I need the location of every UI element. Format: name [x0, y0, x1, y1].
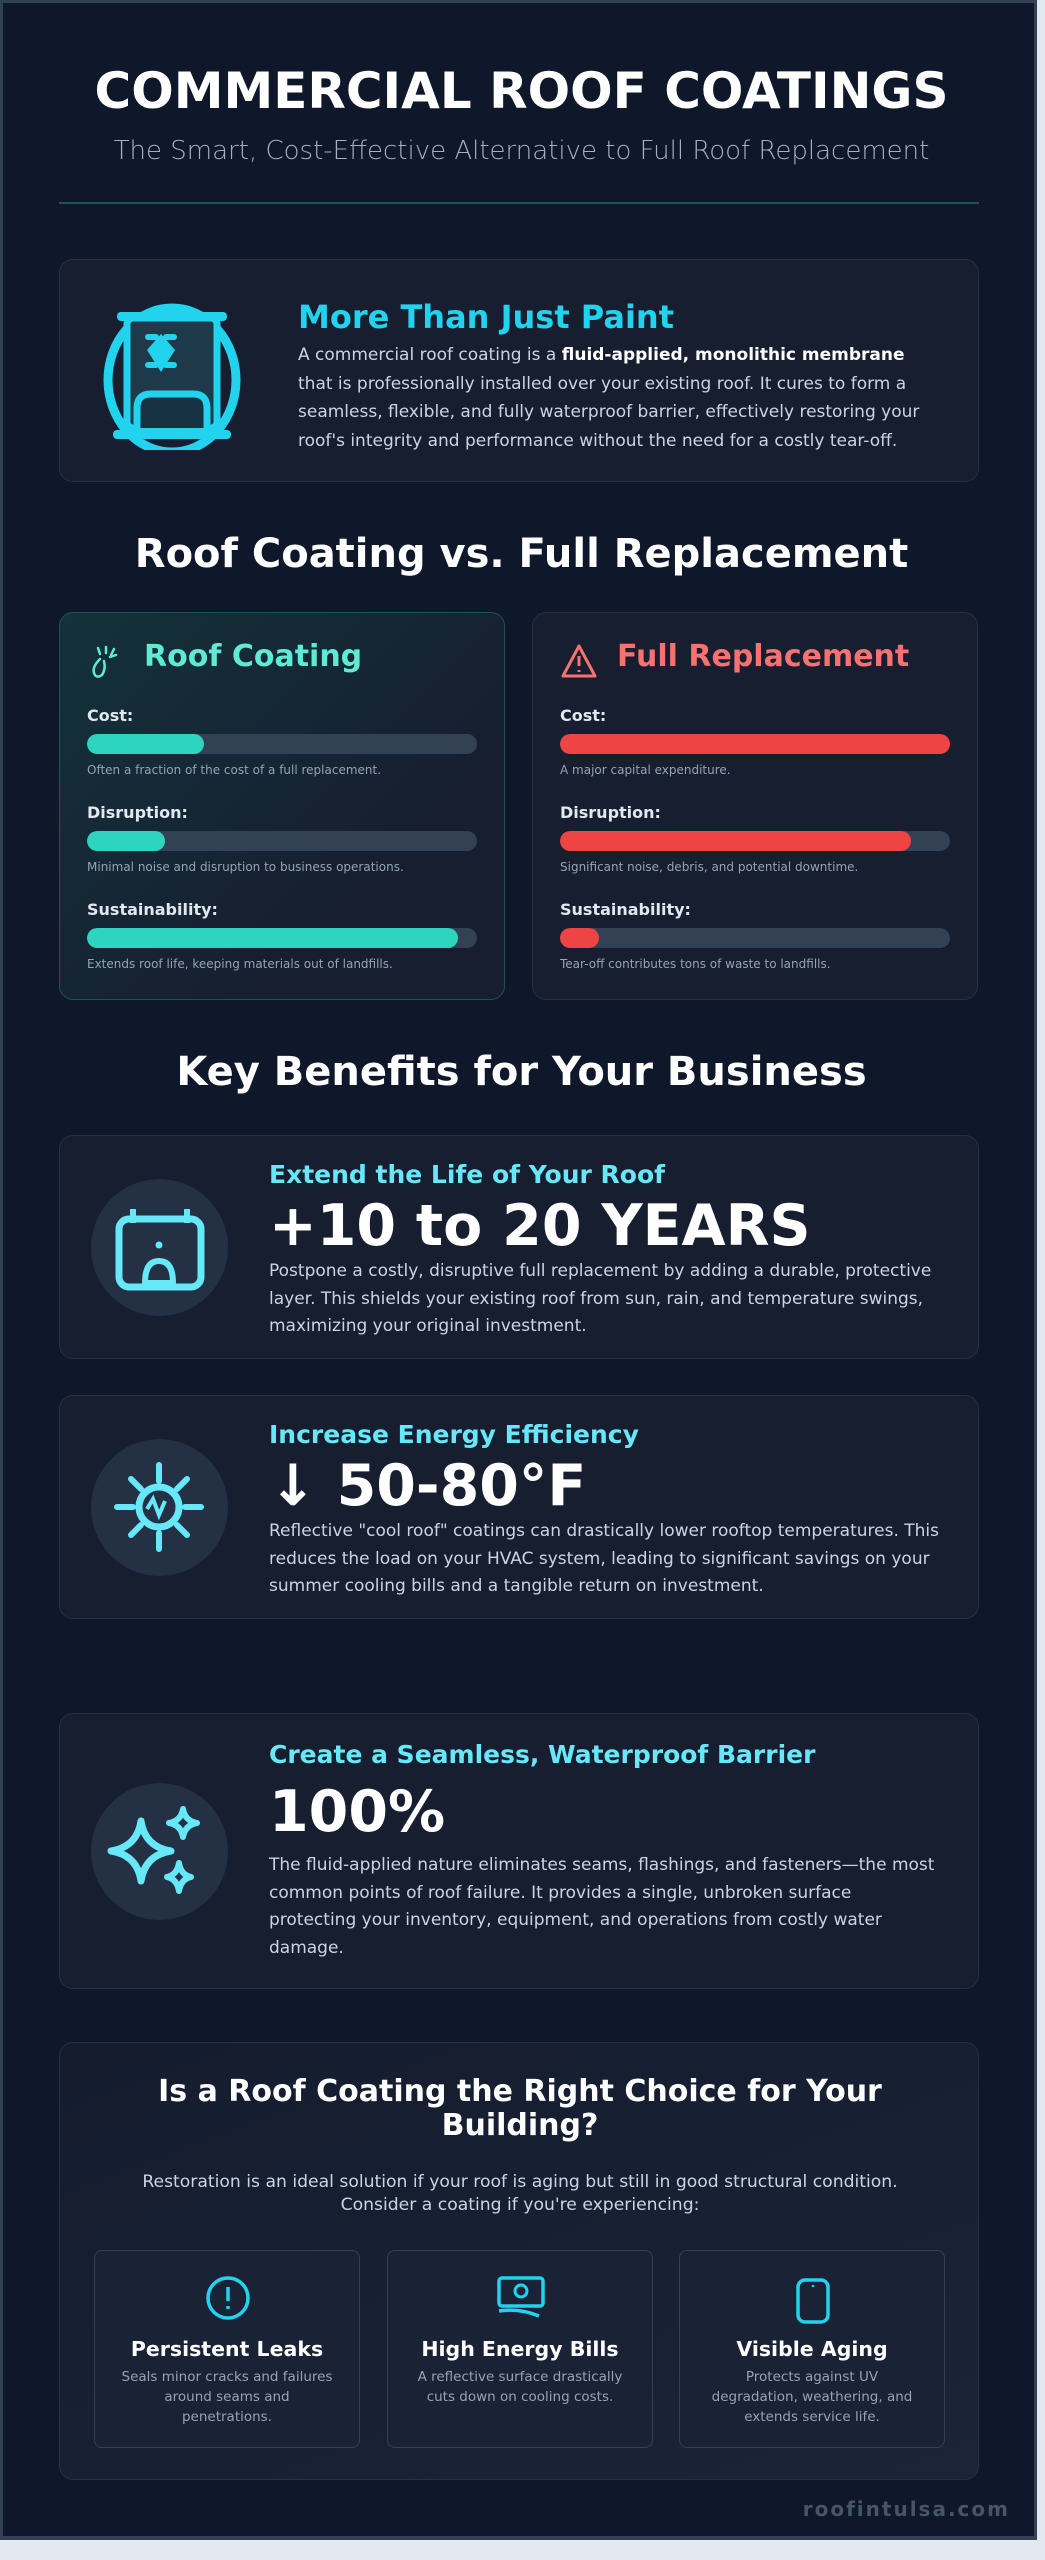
sub-card: leaks: around seams and	[164, 2389, 290, 2405]
heading: comparison: Roof Coating vs. Full Replacement	[135, 531, 908, 577]
panel: roof coating: Extends roof life, keeping materials out of landfills.	[87, 957, 393, 971]
big number: 100%	[269, 1779, 445, 1845]
panel: energy efficiency: summer cooling bills and a tangible return on investment.	[269, 1576, 764, 1596]
bar: cost	[560, 734, 950, 754]
panel: roof coating: Cost:	[87, 706, 133, 725]
panel: roof coating: Disruption:	[87, 803, 188, 822]
sub-card: leaks: Persistent Leaks	[131, 2337, 323, 2361]
bar: disruption	[87, 831, 477, 851]
panel: roof coating: Often a fraction of the cost of a full replacement.	[87, 763, 381, 777]
icon: spray	[92, 646, 118, 678]
panel: full replacement: Significant noise, debris, and potential downtime.	[560, 860, 858, 874]
panel: roof coating: Minimal noise and disruption to business operations.	[87, 860, 404, 874]
panel: energy efficiency: reduces the load on your HVAC system, leading to significant savings on your	[269, 1548, 930, 1568]
sub-card: bills	[387, 2250, 653, 2448]
text block: Consider a coating if you're experiencing:	[341, 2195, 699, 2215]
sub-card: bills: A reflective surface drastically	[418, 2369, 622, 2385]
heading: Full Replacement	[617, 639, 909, 674]
panel: full replacement	[532, 612, 978, 1000]
bar: sustainability	[87, 928, 477, 948]
subtitle: The Smart, Cost-Effective Alternative to Full Roof Replacement	[114, 136, 929, 166]
sub-card: bills: cuts down on cooling costs.	[427, 2389, 613, 2405]
panel: waterproof: Create a Seamless, Waterproof Barrier	[269, 1740, 815, 1769]
text block	[142, 2172, 898, 2215]
sub-card: aging: degradation, weathering, and	[712, 2389, 912, 2405]
footer brand: roofintulsa.com	[803, 2497, 1010, 2521]
sub-card: bills: High Energy Bills	[421, 2337, 619, 2361]
heading: key benefits: Key Benefits for Your Business	[176, 1049, 867, 1095]
panel: full replacement: Tear-off contributes tons of waste to landfills.	[560, 957, 831, 971]
panel: waterproof: The fluid-applied nature eliminates seams, flashings, and fasteners—the most	[269, 1855, 934, 1875]
icon: sun	[91, 1439, 228, 1576]
panel: waterproof: common points of roof failure. It provides a single, unbroken surface	[269, 1882, 851, 1902]
panel: extend life: Postpone a costly, disruptive full replacement by adding a durable, protective	[269, 1261, 931, 1281]
bar: cost	[87, 734, 477, 754]
panel: energy efficiency: Reflective "cool roof" coatings can drastically lower rooftop temperatures. This	[269, 1521, 939, 1541]
panel: waterproof: damage.	[269, 1938, 344, 1958]
bar: disruption	[560, 831, 950, 851]
icon: roof coating bucket	[104, 304, 240, 450]
sub-card: aging: Protects against UV	[746, 2369, 878, 2385]
sub-card: leaks: Seals minor cracks and failures	[122, 2369, 332, 2385]
panel: roof coating	[59, 612, 505, 1000]
text block: Restoration is an ideal solution if your roof is aging but still in good structural condition.	[142, 2172, 898, 2192]
panel: energy efficiency	[59, 1395, 979, 1619]
sub-card: leaks: penetrations.	[182, 2409, 272, 2425]
panel: right choice	[59, 2042, 979, 2480]
big number: ↓ 50-80°F	[269, 1453, 586, 1519]
panel: roof coating: Sustainability:	[87, 900, 218, 919]
icon: warning	[562, 644, 597, 678]
panel: extend life: maximizing your original investment.	[269, 1316, 587, 1336]
bar: sustainability	[560, 928, 950, 948]
panel: waterproof	[59, 1713, 979, 1989]
icon: money	[497, 2276, 545, 2318]
text block: A commercial roof coating is a fluid-applied, monolithic membrane that is professionally installed over your existing roof. It cures to form a seamless, flexible, and fully waterproof barrier, effectively restoring your roof's integrity and performance without the need for a costly tear-off.	[298, 345, 919, 450]
big number: +10 to 20 YEARS	[269, 1193, 811, 1259]
icon: phone	[796, 2278, 830, 2324]
panel: extend life: Extend the Life of Your Roof	[269, 1160, 665, 1189]
panel: extend life: layer. This shields your existing roof from sun, rain, and temperature swings,	[269, 1288, 923, 1308]
heading: Roof Coating	[144, 639, 362, 674]
panel: waterproof: protecting your inventory, equipment, and operations from costly water	[269, 1910, 882, 1930]
title: COMMERCIAL ROOF COATINGS	[94, 62, 948, 120]
icon: alert	[206, 2276, 250, 2320]
panel: full replacement: Disruption:	[560, 803, 661, 822]
panel: full replacement: Cost:	[560, 706, 606, 725]
sub-card: leaks	[94, 2250, 360, 2448]
icon: calendar	[91, 1179, 228, 1316]
heading: Is a Roof Coating the Right Choice for Your Building?	[158, 2074, 882, 2143]
panel: extend life	[59, 1135, 979, 1359]
panel: more than just paint	[59, 259, 979, 482]
panel: energy efficiency: Increase Energy Efficiency	[269, 1420, 639, 1449]
sub-card: aging: extends service life.	[744, 2409, 880, 2425]
panel: full replacement: Sustainability:	[560, 900, 691, 919]
sub-card: aging	[679, 2250, 945, 2448]
icon: sparkles	[91, 1783, 228, 1920]
sub-card: aging: Visible Aging	[736, 2337, 888, 2361]
heading: More Than Just Paint	[298, 298, 674, 336]
panel: full replacement: A major capital expenditure.	[560, 763, 731, 777]
